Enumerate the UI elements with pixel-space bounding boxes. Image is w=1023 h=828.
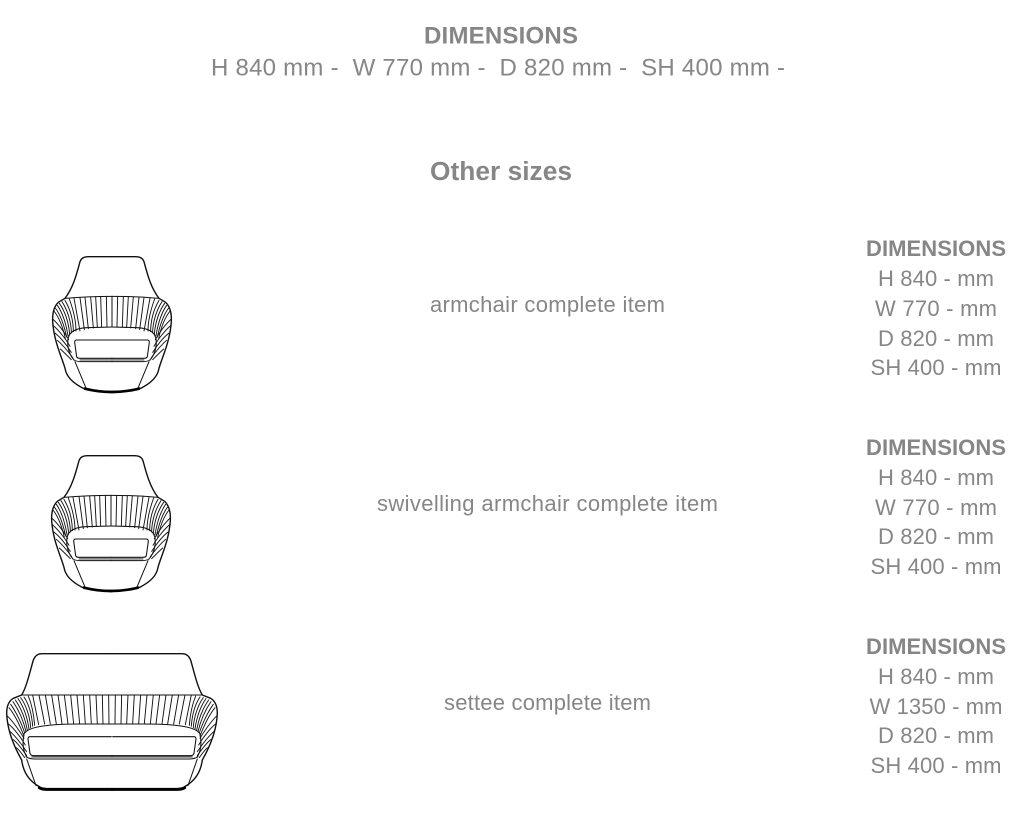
dimensions: swivelling armchair (866, 435, 1006, 579)
heading: dimensions: DIMENSIONS (424, 22, 578, 50)
dimensions: settee: DIMENSIONS (866, 634, 1006, 659)
dimensions: swivelling armchair: DIMENSIONS (866, 435, 1006, 460)
icon: settee line drawing (7, 654, 217, 789)
dimensions: armchair: SH 400 - mm (870, 355, 1002, 380)
row: armchair (53, 236, 1006, 392)
dimensions: armchair: DIMENSIONS (866, 236, 1006, 261)
dimensions: settee: W 1350 - mm (870, 694, 1002, 719)
text: main dimensions: H 840 mm - W 770 mm - D 820 mm - SH 400 mm - (211, 54, 785, 82)
dimensions: armchair: W 770 - mm (875, 296, 997, 321)
dimensions: swivelling armchair: SH 400 - mm (870, 554, 1002, 579)
dimensions: swivelling armchair: D 820 - mm (878, 524, 994, 549)
dimensions: settee (866, 634, 1006, 778)
dimensions: armchair: D 820 - mm (878, 326, 994, 351)
dimensions: swivelling armchair: H 840 - mm (878, 465, 994, 490)
label: armchair: armchair complete item (430, 292, 665, 317)
row: settee (7, 634, 1006, 789)
dimensions: armchair (866, 236, 1006, 380)
dimensions: settee: SH 400 - mm (870, 753, 1002, 778)
dimensions: settee: D 820 - mm (878, 723, 994, 748)
icon: swivelling armchair line drawing (52, 456, 170, 591)
dimensions: settee: H 840 - mm (878, 664, 994, 689)
heading: other sizes: Other sizes (430, 156, 572, 186)
label: settee: settee complete item (444, 690, 651, 715)
dimensions: swivelling armchair: W 770 - mm (875, 495, 997, 520)
dimensions: armchair: H 840 - mm (878, 266, 994, 291)
row: swivelling armchair (52, 435, 1006, 591)
label: swivelling armchair: swivelling armchair complete item (377, 491, 718, 516)
icon: armchair line drawing (53, 257, 171, 392)
